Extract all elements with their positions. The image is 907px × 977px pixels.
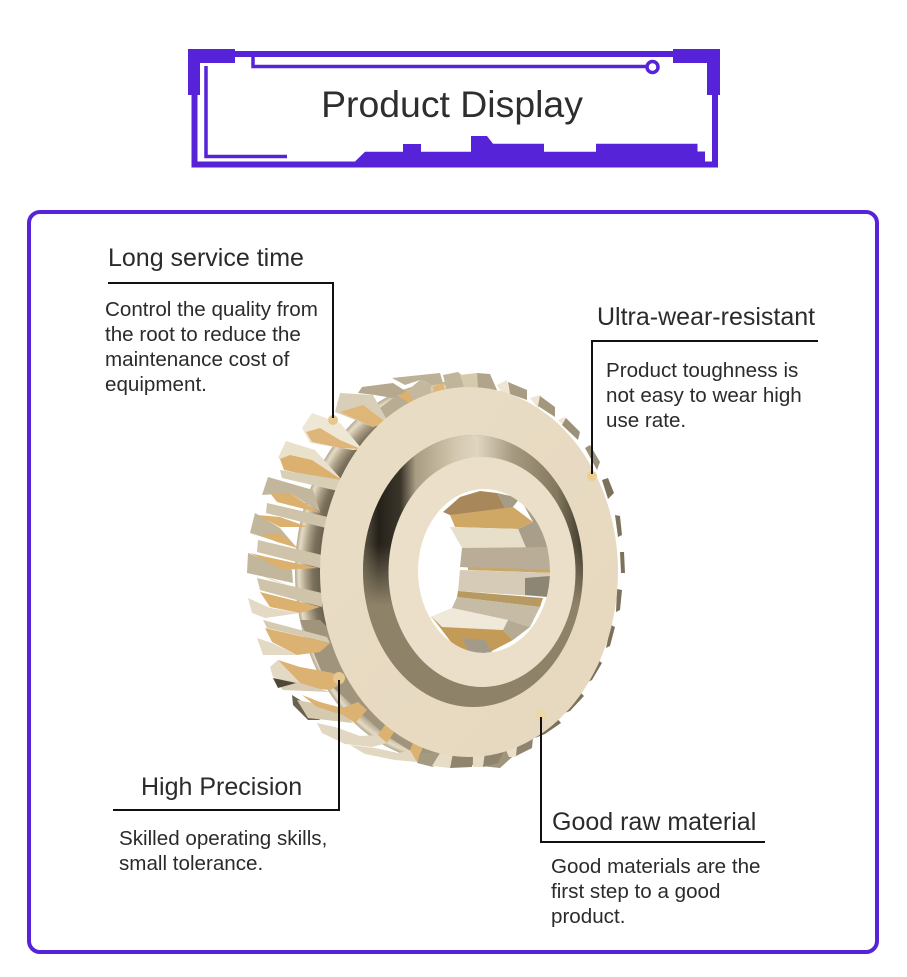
leader line bbox=[113, 680, 339, 810]
description: Product toughness is bbox=[606, 359, 798, 382]
description: maintenance cost of bbox=[105, 348, 290, 371]
heading: Good raw material bbox=[552, 808, 756, 836]
description: small tolerance. bbox=[119, 852, 263, 875]
description: use rate. bbox=[606, 409, 686, 432]
banner node bbox=[647, 62, 658, 72]
description: the root to reduce the bbox=[105, 323, 301, 346]
description: first step to a good bbox=[551, 880, 720, 903]
main panel bbox=[29, 212, 877, 952]
description: not easy to wear high bbox=[606, 384, 802, 407]
gear bore bbox=[418, 489, 550, 653]
gear recessed ring bbox=[363, 435, 583, 707]
marker: long service time bbox=[328, 415, 338, 425]
marker: high precision bbox=[333, 672, 345, 684]
heading: Long service time bbox=[108, 244, 304, 272]
gear top teeth bbox=[335, 372, 614, 499]
callout: good raw material bbox=[541, 717, 765, 928]
gear bottom teeth bbox=[317, 723, 533, 768]
gear shaft behind the face bbox=[295, 382, 597, 762]
gear right teeth bbox=[535, 515, 625, 738]
gear inner hub bbox=[388, 457, 576, 687]
title text: Product Display bbox=[321, 83, 583, 125]
description: product. bbox=[551, 905, 625, 928]
callout: long service time bbox=[105, 244, 333, 418]
marker: ultra-wear-resistant bbox=[587, 471, 597, 481]
banner frame bbox=[188, 49, 720, 168]
callout: high precision bbox=[113, 680, 339, 875]
gear shaft lower shading bbox=[300, 620, 520, 768]
heading: High Precision bbox=[141, 773, 302, 801]
leader line bbox=[592, 341, 818, 474]
description: Control the quality from bbox=[105, 298, 318, 321]
description: Skilled operating skills, bbox=[119, 827, 327, 850]
title banner bbox=[188, 49, 720, 168]
callout: ultra-wear-resistant bbox=[592, 303, 818, 474]
leader line bbox=[541, 717, 765, 842]
description: equipment. bbox=[105, 373, 207, 396]
marker: good raw material bbox=[536, 710, 546, 720]
gear left helical teeth bbox=[247, 413, 367, 723]
heading: Ultra-wear-resistant bbox=[597, 303, 815, 331]
leader line bbox=[108, 283, 333, 418]
banner circuit lines bbox=[206, 57, 646, 156]
description: Good materials are the bbox=[551, 855, 760, 878]
worm gear illustration bbox=[247, 372, 625, 768]
gear front face bbox=[320, 387, 618, 757]
